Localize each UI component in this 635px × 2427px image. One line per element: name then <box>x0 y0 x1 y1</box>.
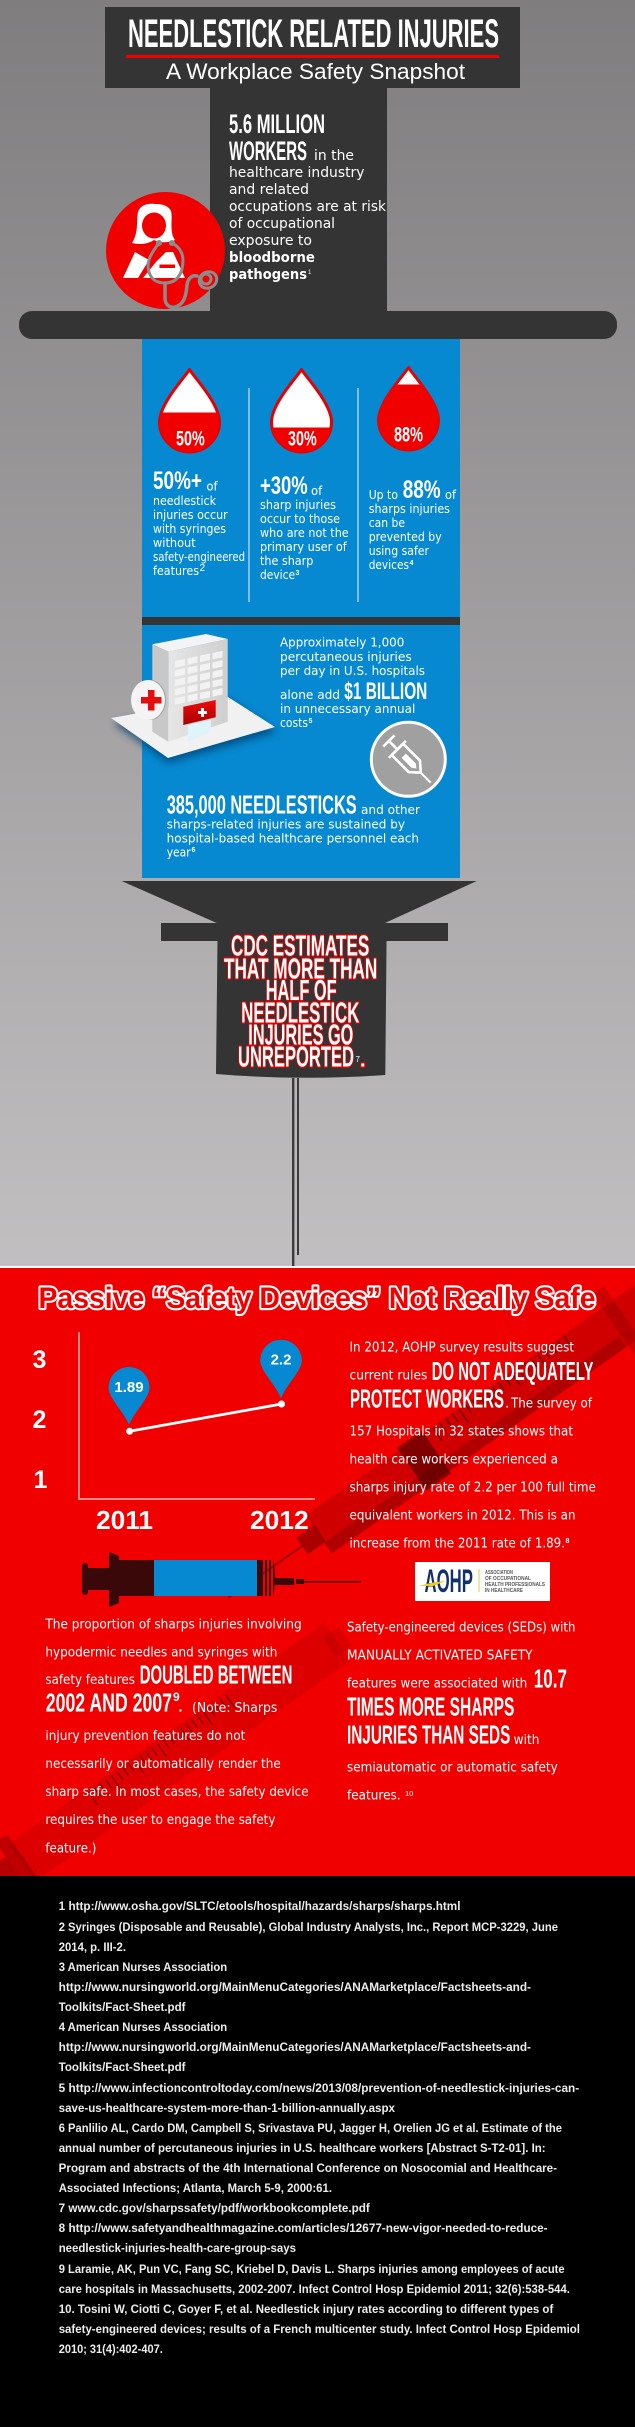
text: doubled between: requires the user to engage the safety <box>45 1812 275 1828</box>
text: +30% column: 3 <box>296 570 300 577</box>
icon: 50% blood drop <box>160 370 220 452</box>
text block: 5.6 million workers: and related <box>229 182 309 198</box>
callout: CDC estimates: THAT MORE THAN <box>224 953 377 985</box>
data pin: 2.2 <box>260 1340 302 1398</box>
logo: AOHP: HEALTH PROFESSIONALS <box>485 1582 546 1588</box>
text: doubled between: The proportion of sharps injuries involving <box>45 1616 302 1632</box>
text: +30% column: +30% <box>260 472 308 500</box>
text: 10.7 times more: TIMES MORE SHARPS <box>347 1692 514 1722</box>
data pin: 2.2: 2.2 <box>271 1352 291 1368</box>
icon: 30% blood drop <box>272 370 332 452</box>
text: +30% column: of <box>311 484 323 498</box>
text: 385,000 needlesticks: and other <box>361 803 420 817</box>
text: AOHP survey: current rules <box>350 1368 427 1384</box>
text: AOHP survey: 8 <box>566 1538 570 1545</box>
panel: references: safety-engineered devices; results of a French multicenter study. Infect Control Hosp Epidemiol <box>59 2324 580 2336</box>
icon: 88% blood drop: 88% <box>394 424 423 446</box>
panel: references: care hospitals in Massachusetts, 2002-2007. Infect Control Hosp Epidemiol 2011; 32(6):538-544. <box>59 2284 570 2296</box>
text: 88% column: 88% <box>403 476 441 504</box>
line chart <box>32 1332 315 1535</box>
icon: 50% blood drop: 50% <box>176 428 205 450</box>
title <box>126 12 499 84</box>
text: 88% column: prevented by <box>369 530 442 544</box>
text: $1 billion: 5 <box>308 718 312 725</box>
text: doubled between <box>45 1616 309 1857</box>
logo: AOHP <box>415 1562 550 1601</box>
text: AOHP survey: PROTECT WORKERS <box>350 1384 504 1414</box>
text block: 5.6 million workers: 1 <box>308 270 312 276</box>
text: 50%+ column: injuries occur <box>153 508 228 522</box>
line chart: 3 <box>32 1346 46 1374</box>
text block: 5.6 million workers: in the <box>314 148 354 164</box>
text: 10.7 times more: 10 <box>405 1789 413 1798</box>
text: 50%+ column: 2 <box>200 563 206 574</box>
text: 88% column: can be <box>369 516 405 530</box>
callout: CDC estimates: UNREPORTED <box>238 1042 354 1074</box>
text: 88% column: 4 <box>410 560 414 567</box>
icon: nurse with stethoscope <box>106 192 225 309</box>
text: $1 billion: Approximately 1,000 <box>280 636 404 650</box>
callout: CDC estimates: . <box>360 1050 366 1072</box>
callout: CDC estimates: NEEDLESTICK <box>241 997 359 1029</box>
text: doubled between: (Note: Sharps <box>192 1700 277 1716</box>
line chart: 2012 <box>250 1505 309 1535</box>
text: 50%+ column: safety-engineered <box>153 550 245 564</box>
callout: CDC estimates: INJURIES GO <box>248 1019 353 1051</box>
text: 50%+ column: 50%+ <box>153 467 202 495</box>
icon: syringe in circle <box>371 722 445 796</box>
panel: references: Toolkits/Fact-Sheet.pdf <box>59 2062 186 2074</box>
text: 88% column: Up to <box>369 488 398 502</box>
needle <box>292 1078 299 1268</box>
text: 50%+ column: with syringes <box>153 522 226 536</box>
text: +30% column: the sharp <box>260 554 313 568</box>
text: AOHP survey: equivalent workers in 2012. This is an <box>350 1508 576 1524</box>
text block: 5.6 million workers: 5.6 MILLION <box>229 109 325 139</box>
text block: 5.6 million workers: healthcare industry <box>229 165 365 181</box>
background syringes <box>0 1285 635 1876</box>
text: doubled between: hypodermic needles and syringes with <box>45 1644 277 1660</box>
callout: CDC estimates <box>224 931 377 1074</box>
icon: hospital <box>111 634 277 763</box>
text: doubled between: safety features <box>45 1672 135 1688</box>
panel: references: http://www.nursingworld.org/MainMenuCategories/ANAMarketplace/Factsheets-and- <box>59 2042 531 2054</box>
text block: 5.6 million workers: of occupational <box>229 216 335 232</box>
text: doubled between: 9 <box>173 1690 180 1704</box>
text: $1 billion: per day in U.S. hospitals <box>280 664 425 678</box>
icon: syringe <box>82 1552 361 1607</box>
data pin: 1.89 <box>108 1367 150 1425</box>
text block: 5.6 million workers: WORKERS <box>229 136 307 166</box>
panel: references: 2 Syringes (Disposable and Reusable), Global Industry Analysts, Inc., Report MCP-3229, June <box>59 1922 558 1934</box>
panel: references: http://www.nursingworld.org/MainMenuCategories/ANAMarketplace/Factsheets-and- <box>59 1982 531 1994</box>
text: 10.7 times more: MANUALLY ACTIVATED SAFETY <box>347 1648 533 1664</box>
syringe plunger top: title and stem <box>19 7 617 339</box>
text: 10.7 times more: semiautomatic or automatic safety <box>347 1760 558 1776</box>
text: +30% column: who are not the <box>260 526 349 540</box>
text: $1 billion <box>280 636 427 730</box>
text: 385,000 needlesticks: hospital-based healthcare personnel each <box>167 831 419 845</box>
panel: references: 2010; 31(4):402-407. <box>59 2344 163 2356</box>
background gradient <box>0 0 635 1266</box>
text: AOHP survey: health care workers experienced a <box>350 1452 558 1468</box>
heading: Passive “Safety Devices” Not Really Safe <box>38 1282 596 1315</box>
text: 10.7 times more: Safety-engineered devices (SEDs) with <box>347 1620 576 1636</box>
text: AOHP survey: The survey of <box>510 1396 593 1412</box>
text: doubled between: . <box>178 1699 182 1715</box>
text: 385,000 needlesticks: 6 <box>192 847 196 854</box>
text: doubled between: sharp safe. In most cases, the safety device <box>45 1784 309 1800</box>
text: doubled between: injury prevention features do not <box>45 1728 245 1744</box>
panel: references: 8 http://www.safetyandhealthmagazine.com/articles/12677-new-vigor-needed-to-reduce- <box>59 2223 548 2235</box>
panel: passive safety devices <box>0 1266 635 1876</box>
panel: references: 1 http://www.osha.gov/SLTC/etools/hospital/hazards/sharps/sharps.html <box>59 1901 460 1913</box>
text block: 5.6 million workers: occupations are at risk <box>229 199 387 215</box>
text: $1 billion: costs <box>280 716 308 730</box>
text block: 5.6 million workers: bloodborne <box>229 250 315 266</box>
text block: 5.6 million workers: exposure to <box>229 233 312 249</box>
panel: references: 3 American Nurses Association <box>59 1962 227 1974</box>
panel: references: 9 Laramie, AK, Pun VC, Fang SC, Kriebel D, Davis L. Sharps injuries among employees of acute <box>59 2264 565 2276</box>
text: 88% column <box>369 476 457 572</box>
panel: costs <box>111 625 460 878</box>
text block: 5.6 million workers <box>229 109 387 283</box>
text: 385,000 needlesticks: year <box>167 846 191 860</box>
text: +30% column: device <box>260 568 295 582</box>
text: $1 billion: percutaneous injuries <box>280 650 412 664</box>
callout: CDC estimates: CDC ESTIMATES <box>231 931 369 963</box>
panel: statistics <box>142 339 460 617</box>
text: AOHP survey <box>350 1340 596 1552</box>
panel: references: Toolkits/Fact-Sheet.pdf <box>59 2002 186 2014</box>
data pin: 1.89: 1.89 <box>114 1379 144 1396</box>
panel: references: 10. Tosini W, Ciotti C, Goyer F, et al. Needlestick injury rates according to different types of <box>59 2304 553 2316</box>
text: 50%+ column: needlestick <box>153 494 216 508</box>
panel: references: 2014, p. III-2. <box>59 1942 126 1954</box>
text: 10.7 times more <box>347 1620 576 1804</box>
text: doubled between: DOUBLED BETWEEN <box>140 1659 292 1689</box>
text: doubled between: feature.) <box>45 1841 96 1857</box>
text: 10.7 times more: 10.7 <box>534 1664 567 1694</box>
text: 10.7 times more: with <box>514 1732 540 1748</box>
text: 88% column: sharps injuries <box>369 502 450 516</box>
text: 10.7 times more: features were associated with <box>347 1676 527 1692</box>
panel: references: save-us-healthcare-system-more-than-1-billion-annually.aspx <box>59 2103 396 2115</box>
panel: references: Associated Infections; Atlanta, March 5-9, 2000:61. <box>59 2183 332 2195</box>
panel: references: needlestick-injuries-health-care-group-says <box>59 2243 296 2255</box>
text: 50%+ column: features <box>153 564 199 578</box>
text: AOHP survey: In 2012, AOHP survey results suggest <box>350 1340 574 1356</box>
text: doubled between: 2002 AND 2007 <box>46 1688 172 1718</box>
icon: 88% blood drop <box>378 368 438 450</box>
text: 50%+ column <box>153 467 245 578</box>
callout: CDC estimates: HALF OF <box>266 975 337 1007</box>
text: 50%+ column: of <box>206 480 218 494</box>
text: doubled between: necessarily or automatically render the <box>45 1756 281 1772</box>
text: 385,000 needlesticks <box>167 789 420 860</box>
text: $1 billion: $1 BILLION <box>344 678 427 705</box>
syringe tip: funnel, bar and hub <box>122 881 477 1078</box>
text: 385,000 needlesticks: sharps-related injuries are sustained by <box>167 817 405 831</box>
text: 385,000 needlesticks: 385,000 NEEDLESTICKS <box>167 789 357 819</box>
text: +30% column: sharp injuries <box>260 498 336 512</box>
panel: references: 6 Panlilio AL, Cardo DM, Campbell S, Srivastava PU, Jagger H, Orelien JG et al. Estimate of the <box>59 2123 562 2135</box>
divider bar <box>142 617 460 625</box>
panel: references: 5 http://www.infectioncontroltoday.com/news/2013/08/prevention-of-needlestick-injuries-can- <box>59 2083 579 2095</box>
text: 10.7 times more: features. <box>347 1788 401 1804</box>
panel: references: Program and abstracts of the 4th International Conference on Nosocomial and Healthcare- <box>59 2163 557 2175</box>
panel: references: 7 www.cdc.gov/sharpssafety/pdf/workbookcomplete.pdf <box>59 2203 370 2215</box>
text: AOHP survey: sharps injury rate of 2.2 per 100 full time <box>350 1480 596 1496</box>
line chart: 1 <box>34 1466 48 1494</box>
logo: AOHP: OF OCCUPATIONAL <box>485 1576 531 1582</box>
text: 88% column: of <box>445 488 457 502</box>
icon: 30% blood drop: 30% <box>288 428 317 450</box>
text: 10.7 times more: INJURIES THAN SEDS <box>347 1720 510 1750</box>
callout: CDC estimates: 7 <box>356 1055 360 1064</box>
text: AOHP survey: . <box>505 1396 509 1412</box>
logo: AOHP: ASSOCIATION <box>485 1570 513 1576</box>
text: $1 billion: in unnecessary annual <box>280 702 415 716</box>
title: A Workplace Safety Snapshot <box>166 59 465 84</box>
line chart: 2 <box>32 1406 46 1434</box>
panel: references: annual number of percutaneous injuries in U.S. healthcare workers [Abstract S-T2-01]. In: <box>59 2143 546 2155</box>
text: 50%+ column: without <box>153 536 196 550</box>
text: +30% column: primary user of <box>260 540 347 554</box>
panel: references <box>0 1876 635 2427</box>
text: $1 billion: alone add <box>280 688 340 702</box>
text: 88% column: devices <box>369 558 409 572</box>
panel: references: 4 American Nurses Association <box>59 2022 227 2034</box>
text: +30% column: occur to those <box>260 512 340 526</box>
text: AOHP survey: increase from the 2011 rate of 1.89. <box>350 1536 565 1552</box>
logo: AOHP: IN HEALTHCARE <box>485 1588 524 1594</box>
text block: 5.6 million workers: pathogens <box>229 267 307 283</box>
logo: AOHP: AOHP <box>424 1563 473 1599</box>
line chart: 2011 <box>96 1505 153 1535</box>
text: 88% column: using safer <box>369 544 429 558</box>
text: AOHP survey: 157 Hospitals in 32 states shows that <box>350 1424 573 1440</box>
text: +30% column <box>260 472 349 582</box>
